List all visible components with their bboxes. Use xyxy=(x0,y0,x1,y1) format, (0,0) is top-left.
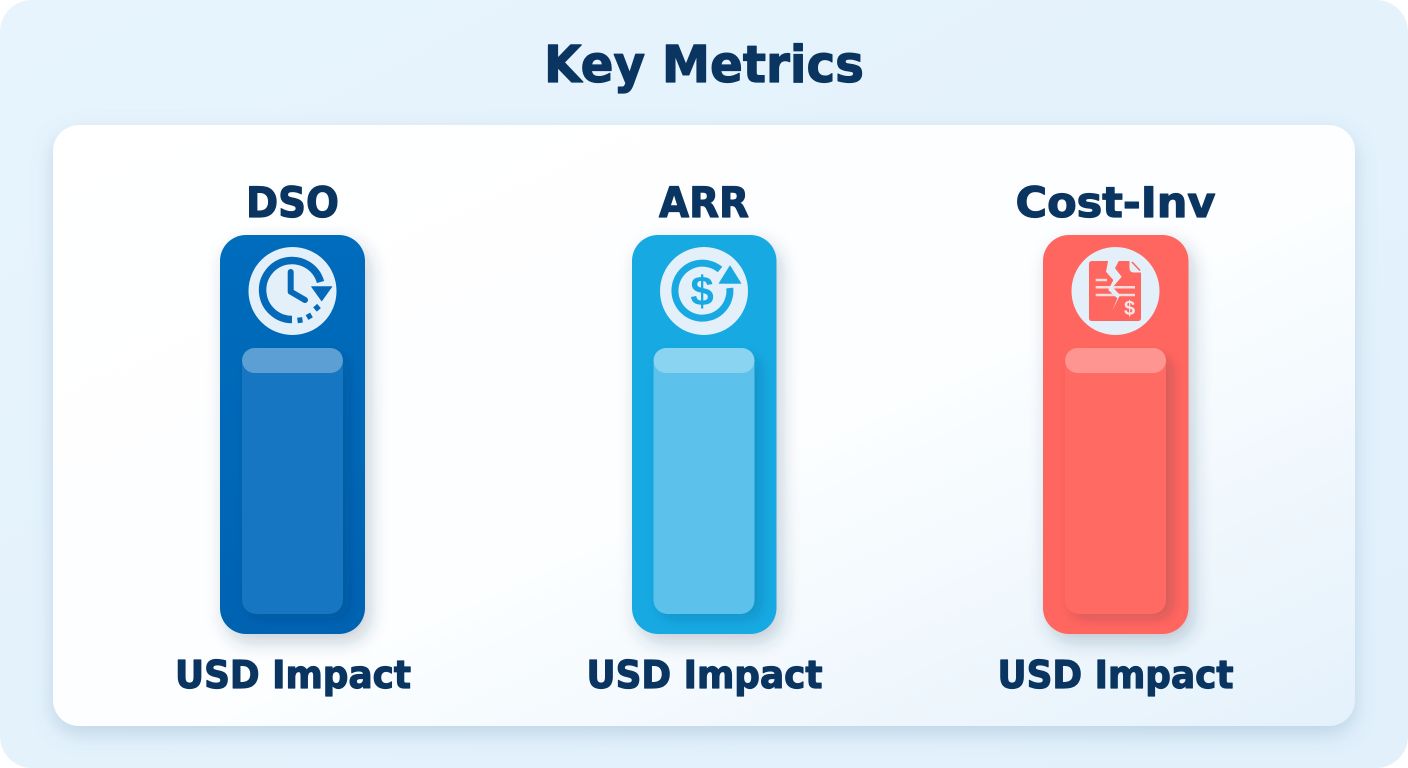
heading: ARR: ARR xyxy=(659,178,749,227)
heading: Cost-Inv: Cost-Inv xyxy=(1016,178,1216,227)
bar: Cost-Inv xyxy=(1043,235,1188,634)
heading: DSO: DSO xyxy=(246,178,339,227)
bar: DSO xyxy=(220,235,365,634)
metric column: DSO xyxy=(220,178,365,634)
label: USD Impact 1: USD Impact xyxy=(175,653,411,697)
dollar sign: $ xyxy=(1124,298,1135,320)
title: Key Metrics xyxy=(544,36,864,95)
bar: ARR xyxy=(632,235,776,634)
dollar sign: $ xyxy=(690,268,714,314)
panel: metrics card xyxy=(53,125,1355,726)
icon: dollar with circular up arrow xyxy=(660,247,748,335)
metric column: ARR xyxy=(632,178,776,634)
metric column: Cost-Inv xyxy=(1016,178,1216,634)
icon: clock with clockwise arrow xyxy=(248,247,336,335)
label: USD Impact 2: USD Impact xyxy=(586,653,822,697)
label: USD Impact 3: USD Impact xyxy=(998,653,1234,697)
icon: torn invoice with dollar xyxy=(1072,247,1160,335)
